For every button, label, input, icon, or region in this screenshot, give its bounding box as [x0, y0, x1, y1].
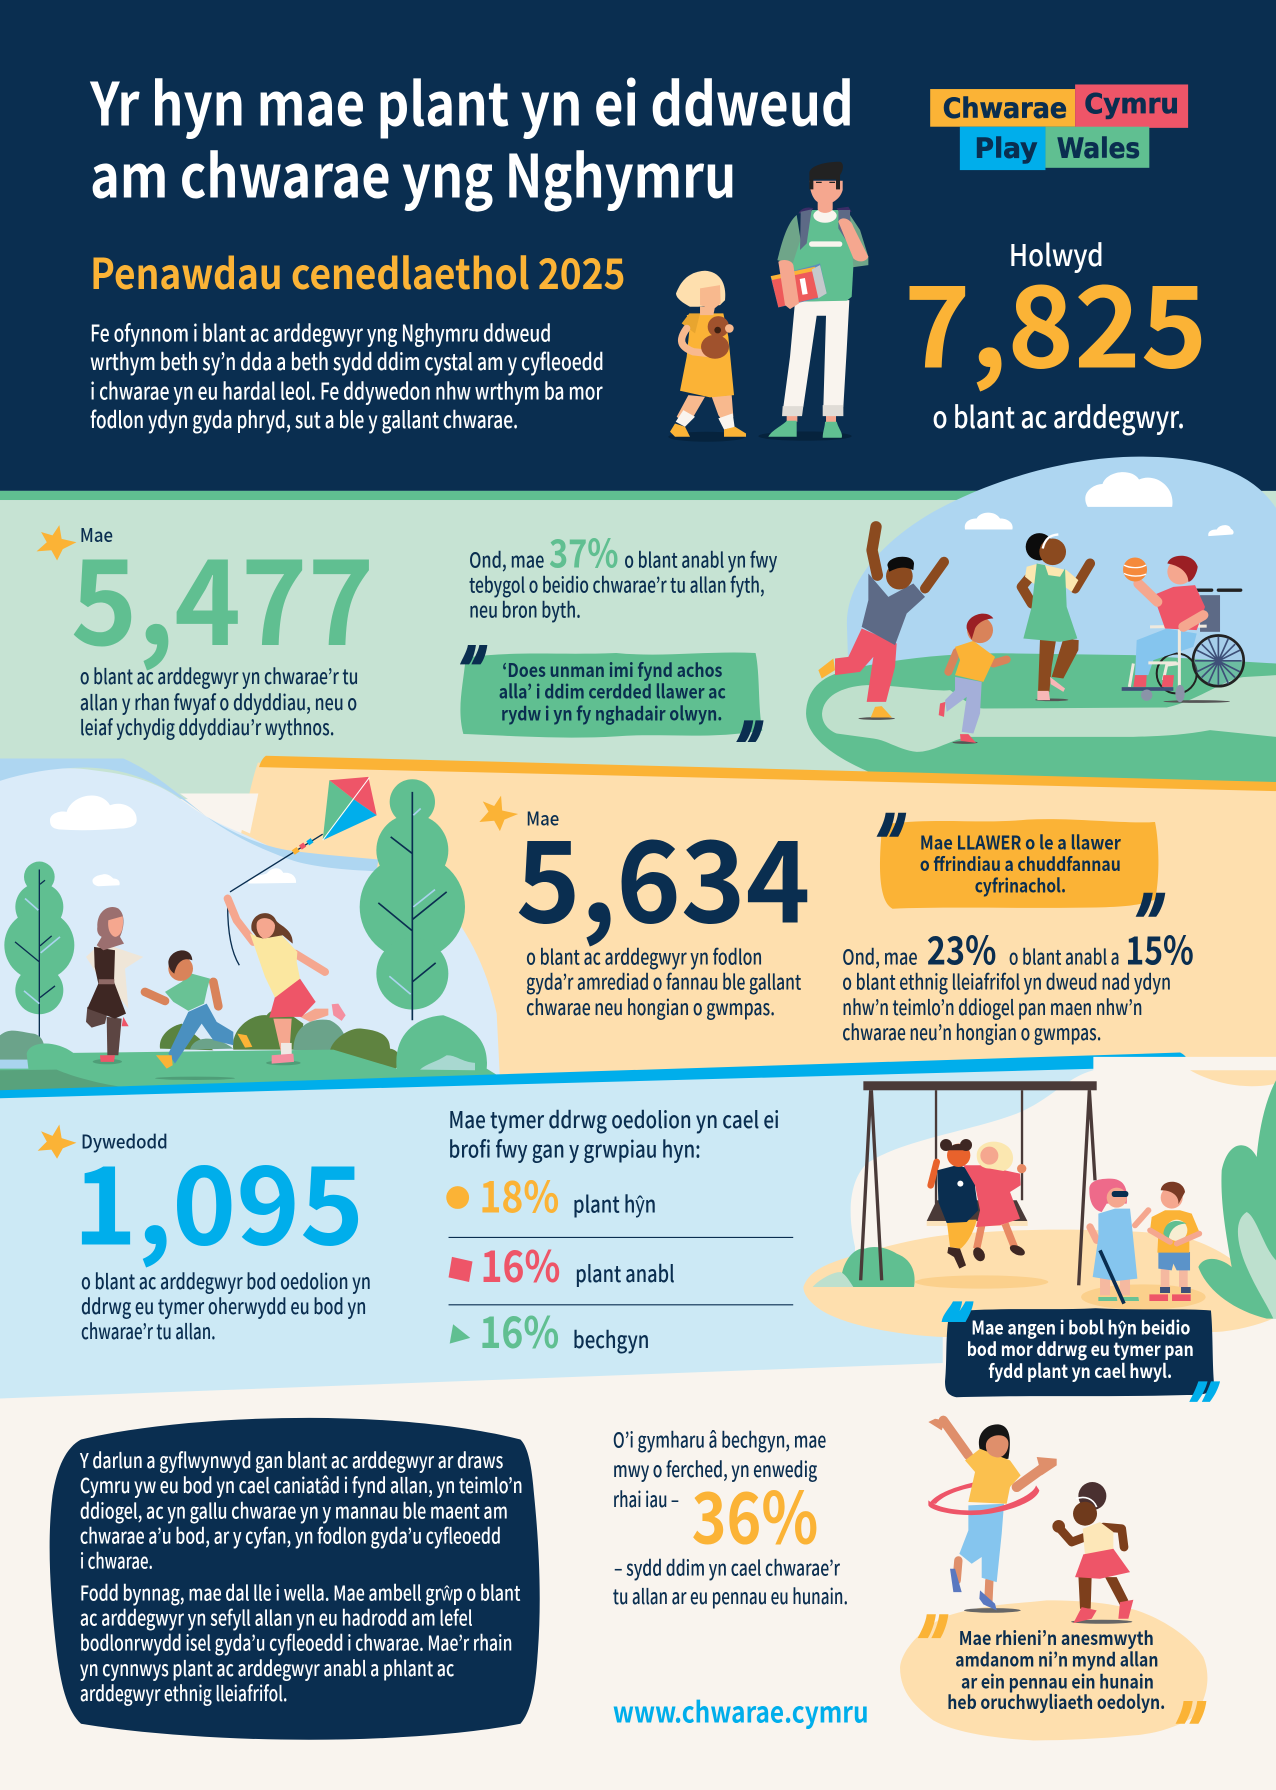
summary: navy rounded panel: ddiogel, ac yn gallu chwarae yn y mannau ble maent am: [80, 1494, 508, 1524]
woman in hijab: [86, 907, 143, 1064]
lead-in word: Mae: [526, 804, 559, 831]
quote: navy box: bod mor ddrwg eu tymer pan: [967, 1335, 1194, 1362]
text: 37% of disabled children: tebygol o beidio chwarae’r tu allan fyth,: [469, 568, 765, 598]
description: allan y rhan fwyaf o ddyddiau, neu o: [80, 686, 357, 716]
small child running: [939, 614, 1007, 744]
text: 36% girls: – sydd ddim yn cael chwarae’r: [614, 1551, 840, 1581]
row: 16% plant anabl: 16%: [480, 1233, 560, 1295]
quote: sand blob: [918, 1614, 1206, 1724]
illustration: teen and small girl with teddy: [668, 162, 868, 442]
illustration: children at the swings: [803, 1057, 1276, 1337]
description: o blant ac arddegwyr yn fodlon: [526, 941, 762, 971]
clouds: [50, 796, 296, 886]
row: 18% plant hŷn: 18%: [479, 1163, 559, 1225]
text: 23% and 15% feel unsafe: chwarae neu’n hongian o gwmpas.: [842, 1016, 1101, 1046]
logo: Chwarae Cymru Play Wales: Wales: [1057, 134, 1140, 165]
panel: header background: [0, 0, 1276, 492]
big number: 5,477: [71, 508, 374, 680]
cream blob: [851, 1057, 1276, 1277]
illustration: girls with hula hoop: [900, 1419, 1207, 1740]
summary: navy rounded panel: ac arddegwyr yn sefyll allan yn eu hadrodd am lefel: [80, 1602, 473, 1632]
subtitle: Penawdau cenedlaethol 2025: [90, 241, 625, 302]
text: 23% and 15% feel unsafe: o blant anabl a: [1009, 941, 1120, 971]
row: 18% plant hŷn: [446, 1163, 656, 1225]
text: 36% girls: rhai iau –: [613, 1483, 679, 1513]
description: leiaf ychydig ddyddiau’r wythnos.: [80, 711, 334, 741]
list heading: Mae tymer ddrwg oedolion yn cael ei: [449, 1102, 780, 1135]
child on swing: pink dress: [963, 1142, 1026, 1263]
text: 23% and 15% feel unsafe: [842, 921, 1194, 1046]
row: 16% plant anabl: plant anabl: [575, 1256, 675, 1289]
quote: navy box: Mae angen i bobl hŷn beidio: [971, 1314, 1190, 1341]
text: 36% girls: 36%: [692, 1462, 818, 1564]
description: [81, 1265, 371, 1345]
bush: [813, 1247, 915, 1287]
title: [89, 58, 854, 215]
sand: [803, 1230, 1276, 1337]
tree: large: [360, 779, 465, 1020]
small clouds: [965, 513, 1234, 536]
intro text block: [90, 315, 604, 435]
description: o blant ac arddegwyr bod oedolion yn: [81, 1265, 371, 1295]
intro text block: wrthym beth sy’n dda a beth sydd ddim cystal am y cyfleoedd: [90, 344, 604, 377]
small girl: [668, 271, 746, 442]
panel: section 3 blue background: [0, 1053, 1193, 1398]
title: am chwarae yng Nghymru: [90, 129, 736, 215]
text: 37% of disabled children: neu bron byth.: [469, 594, 581, 624]
intro text block: fodlon ydyn gyda phryd, sut a ble y gallant chwarae.: [90, 402, 518, 435]
text: 37% of disabled children: [469, 523, 777, 624]
panel: section 2 orange background: [234, 756, 1276, 1094]
list heading: [449, 1102, 780, 1165]
icon: star: [479, 796, 518, 831]
description: chwarae neu hongian o gwmpas.: [526, 991, 775, 1021]
icon: star: [37, 525, 76, 561]
quote: orange box: [877, 813, 1165, 917]
row: 18% plant hŷn: plant hŷn: [573, 1186, 656, 1219]
summary: navy rounded panel: Y darlun a gyflwynwyd gan blant ac arddegwyr ar draws: [79, 1444, 503, 1474]
text: 23% and 15% feel unsafe: 23%: [927, 921, 996, 977]
icon: star: [38, 1124, 76, 1159]
stat: 7,825 children surveyed: Holwyd: [1009, 232, 1104, 275]
text: 23% and 15% feel unsafe: Ond, mae: [842, 941, 918, 971]
sky and trim: [0, 768, 500, 1097]
description: o blant ac arddegwyr yn chwarae’r tu: [80, 660, 358, 690]
description: [526, 941, 801, 1021]
summary: navy rounded panel: [50, 1418, 540, 1740]
summary: navy rounded panel: arddegwyr ethnig lleiafrifol.: [80, 1677, 288, 1707]
big number: 5,634: [516, 791, 810, 955]
quote: sand blob: heb oruchwyliaeth oedolyn.: [947, 1688, 1165, 1715]
quote: green box: rydw i yn fy nghadair olwyn.: [501, 699, 722, 726]
plant: large leaves: [1198, 1080, 1276, 1319]
logo: Chwarae Cymru Play Wales: Chwarae: [943, 94, 1067, 125]
row: 16% bechgyn: [450, 1299, 649, 1361]
description: chwarae’r tu allan.: [81, 1315, 216, 1345]
tree: small: [4, 862, 74, 1037]
big number: 1,095: [73, 1119, 364, 1276]
logo: Chwarae Cymru Play Wales: [930, 84, 1188, 170]
summary: navy rounded panel: Fodd bynnag, mae dal lle i wella. Mae ambell grŵp o blant: [80, 1576, 520, 1606]
light path: [822, 675, 1276, 752]
quote: orange box: Mae LLAWER o le a llawer: [920, 828, 1121, 855]
ground and path: [806, 653, 1276, 794]
girl with hoop: [928, 1419, 1057, 1613]
ground: [0, 1015, 500, 1094]
summary: navy rounded panel: bodlonrwydd isel gyda’u cyfleoedd i chwarae. Mae’r rhain: [80, 1627, 512, 1657]
quote: green box: [460, 645, 764, 742]
row: 16% plant anabl: [449, 1233, 675, 1295]
quote: orange box: o ffrindiau a chuddfannau: [920, 850, 1121, 877]
swing frame: [861, 1081, 1097, 1285]
child with ball: [1149, 1182, 1199, 1301]
summary: navy rounded panel: yn cynnwys plant ac arddegwyr anabl a phlant ac: [80, 1652, 455, 1682]
text: 37% of disabled children: o blant anabl yn fwy: [624, 543, 777, 573]
teen: [758, 162, 868, 441]
sand blob: [900, 1600, 1207, 1740]
text: 36% girls: [613, 1424, 848, 1610]
list heading: brofi fwy gan y grwpiau hyn:: [449, 1132, 701, 1165]
child with cane: [1089, 1179, 1148, 1304]
quote: sand blob: Mae rhieni’n anesmwyth: [959, 1624, 1154, 1651]
text: 23% and 15% feel unsafe: o blant ethnig lleiafrifol yn dweud nad ydyn: [842, 966, 1171, 996]
text: 36% girls: O’i gymharu â bechgyn, mae: [613, 1424, 826, 1454]
child on swing: navy dress: [931, 1139, 978, 1269]
quote: navy box: [942, 1301, 1220, 1402]
girl holding the kite string: [228, 899, 346, 1065]
description: ddrwg eu tymer oherwydd eu bod yn: [81, 1290, 366, 1320]
lead-in word: Mae: [80, 521, 113, 548]
panel: section 1 green background: [0, 491, 1276, 799]
row: 16% bechgyn: bechgyn: [573, 1322, 649, 1355]
website link: www.chwarae.cymru: [613, 1691, 869, 1732]
summary: navy rounded panel: Cymru yw eu bod yn cael caniatâd i fynd allan, yn teimlo’n: [80, 1469, 523, 1499]
row: 16% bechgyn: 16%: [479, 1299, 559, 1361]
stat panel: 5,634 happy with range of spaces: [479, 791, 810, 1021]
boy jumping: [818, 527, 944, 720]
stat panel: 1,095 adults grumpy: [38, 1119, 371, 1345]
summary: navy rounded panel: chwarae a’u bod, ar y cyfan, yn fodlon gyda’u cyfleoedd: [80, 1519, 501, 1549]
text: 36% girls: mwy o ferched, yn enwedig: [613, 1453, 817, 1483]
list: groups experiencing adult temper: [446, 1102, 793, 1361]
intro text block: Fe ofynnom i blant ac arddegwyr yng Nghymru ddweud: [90, 315, 551, 348]
text: 37% of disabled children: 37%: [549, 523, 619, 579]
logo: Chwarae Cymru Play Wales: Cymru: [1084, 89, 1179, 120]
lead-in word: Dywedodd: [81, 1127, 168, 1154]
quote: sand blob: ar ein pennau ein hunain: [961, 1667, 1154, 1694]
description: [80, 660, 358, 741]
description: gyda’r amrediad o fannau ble gallant: [526, 966, 801, 996]
logo: Chwarae Cymru Play Wales: Play: [975, 134, 1038, 165]
quote: navy box: fydd plant yn cael hwyl.: [988, 1357, 1172, 1384]
illustration: sky blob with large cloud: [847, 457, 1276, 731]
summary: navy rounded panel: i chwarae.: [80, 1545, 153, 1575]
bushes: [0, 1010, 400, 1071]
boy running: [145, 950, 252, 1080]
quote: green box: ‘Does unman imi fynd achos: [502, 656, 722, 683]
text: 23% and 15% feel unsafe: nhw’n teimlo’n ddiogel pan maen nhw’n: [842, 991, 1142, 1021]
illustration: children flying a kite in a park: [0, 759, 500, 1097]
text: 23% and 15% feel unsafe: 15%: [1125, 921, 1194, 977]
kite: [228, 777, 377, 965]
illustration: children playing on green hill: [806, 513, 1276, 794]
stat panel: 5,477 play outside: [37, 508, 374, 741]
title: Yr hyn mae plant yn ei ddweud: [89, 58, 854, 144]
text: 36% girls: tu allan ar eu pennau eu hunain.: [613, 1580, 848, 1610]
girl dancing: [1052, 1482, 1133, 1624]
quote: sand blob: amdanom ni’n mynd allan: [955, 1646, 1158, 1673]
boy in wheelchair: [1122, 556, 1244, 703]
quote: green box: alla’ i ddim cerdded llawer ac: [499, 678, 726, 705]
quote: orange box: cyfrinachol.: [975, 872, 1066, 899]
text: 37% of disabled children: Ond, mae: [469, 543, 544, 573]
stat: 7,825 children surveyed: 7,825: [904, 237, 1208, 401]
girl in green dress: [1022, 533, 1090, 701]
stat: 7,825 children surveyed: o blant ac arddegwyr.: [932, 394, 1185, 437]
intro text block: i chwarae yn eu hardal leol. Fe ddywedon nhw wrthym ba mor: [90, 374, 603, 407]
